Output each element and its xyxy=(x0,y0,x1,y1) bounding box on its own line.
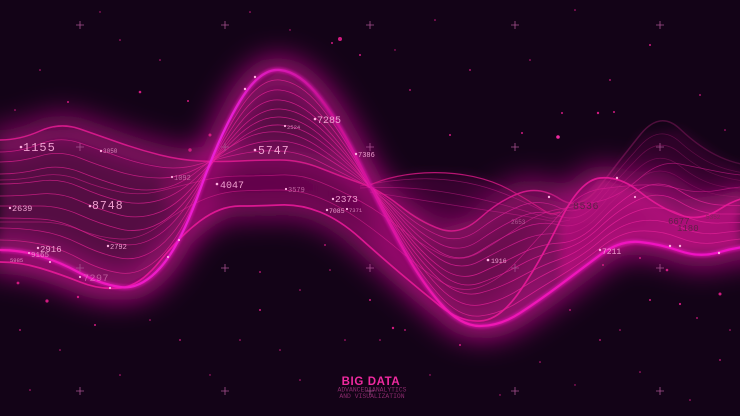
wave edge: lower strand xyxy=(0,178,740,321)
data number labels: 7085 xyxy=(329,208,345,215)
upper right band edge xyxy=(368,173,560,214)
grid of plus markers xyxy=(76,21,664,395)
data number labels: 7386 xyxy=(358,152,375,160)
data number labels: 1092 xyxy=(174,175,191,183)
bright nodes on the wave xyxy=(9,76,720,289)
data number labels: 2792 xyxy=(110,244,127,252)
data number labels: 5352 xyxy=(706,214,721,221)
data number labels: 2639 xyxy=(12,204,32,214)
data number labels xyxy=(10,116,721,285)
data number labels: 1155 xyxy=(23,141,56,155)
logo subtitle: AND VISUALIZATION xyxy=(339,393,405,400)
logo subtitle: ADVANCED ANALYTICS xyxy=(337,386,407,394)
logo: Big Data heading: BIG DATA xyxy=(342,376,400,388)
data number labels: 4047 xyxy=(220,181,244,192)
ribbon body fill xyxy=(0,70,740,326)
data number labels: 5747 xyxy=(258,145,290,158)
data number labels: 8748 xyxy=(92,200,124,213)
data number labels: 2916 xyxy=(40,245,62,255)
data number labels: 7297 xyxy=(83,274,109,285)
data number labels: 2524 xyxy=(287,124,301,131)
wave edge: bright main strand glow xyxy=(0,70,740,326)
data number labels: 5985 xyxy=(10,257,23,264)
data number labels: 2373 xyxy=(335,194,358,205)
data number labels: 3050 xyxy=(103,148,118,155)
data number labels: 1916 xyxy=(491,258,507,265)
logo subtitle xyxy=(337,386,407,400)
data number labels: 1180 xyxy=(677,224,699,234)
wave ribbon fine lines, upper half xyxy=(0,125,740,266)
data number labels: 6677 xyxy=(668,217,690,227)
data number labels: 7211 xyxy=(602,248,621,257)
outer glow behind the wave xyxy=(0,70,740,326)
data number labels: 7371 xyxy=(349,207,363,214)
data number labels: 3579 xyxy=(288,187,305,195)
wave edge: upper strand xyxy=(0,121,740,231)
data number labels: 9165 xyxy=(31,252,50,260)
data number labels: 2653 xyxy=(511,219,526,226)
wave ribbon fine lines, lower half xyxy=(0,80,740,316)
data number labels: 8536 xyxy=(573,202,599,213)
data number labels: 7285 xyxy=(317,116,341,127)
wave edge: bright main strand xyxy=(0,70,740,326)
